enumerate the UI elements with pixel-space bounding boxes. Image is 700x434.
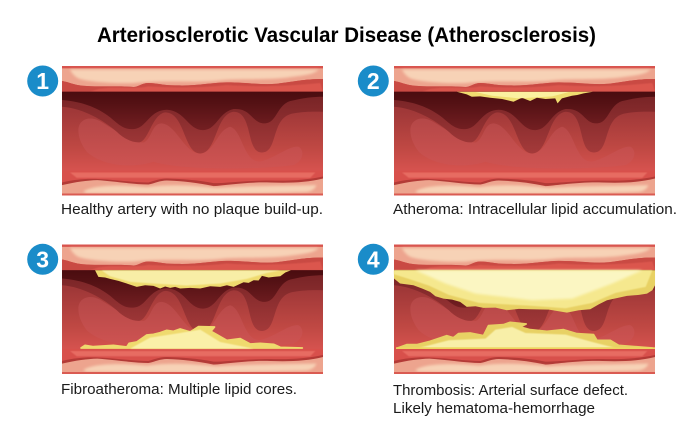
- badge 2: 2: [367, 68, 380, 94]
- artery illustration 1: [62, 66, 323, 196]
- small lipid plaque: [457, 92, 593, 103]
- caption 4: Thrombosis: Arterial surface defect.: [393, 382, 628, 399]
- badge 1: 1: [36, 68, 49, 94]
- caption 4: [393, 382, 628, 417]
- caption 1: Healthy artery with no plaque build-up.: [61, 201, 323, 218]
- upper and lower lipid cores: [81, 270, 302, 349]
- badge 3: [27, 244, 58, 275]
- badge 4: [358, 244, 389, 275]
- title: Arteriosclerotic Vascular Disease (Atherosclerosis): [97, 24, 596, 47]
- caption 2: Atheroma: Intracellular lipid accumulation.: [393, 201, 677, 218]
- caption 3: Fibroatheroma: Multiple lipid cores.: [61, 381, 297, 398]
- badge 3: 3: [36, 246, 49, 272]
- artery illustration 2: [394, 66, 655, 196]
- large upper and lower plaques: [394, 270, 655, 349]
- artery illustration 4: [394, 244, 655, 374]
- panel 1: healthy artery: [27, 66, 323, 218]
- panel 4: thrombosis: [358, 244, 655, 417]
- badge 1: [27, 66, 58, 96]
- panel 2: atheroma: [358, 66, 677, 218]
- badge 4: 4: [367, 246, 380, 272]
- caption 4: Likely hematoma-hemorrhage: [393, 400, 595, 417]
- badge 2: [358, 66, 389, 96]
- panel 3: fibroatheroma: [27, 244, 323, 398]
- artery illustration 3: [62, 244, 323, 374]
